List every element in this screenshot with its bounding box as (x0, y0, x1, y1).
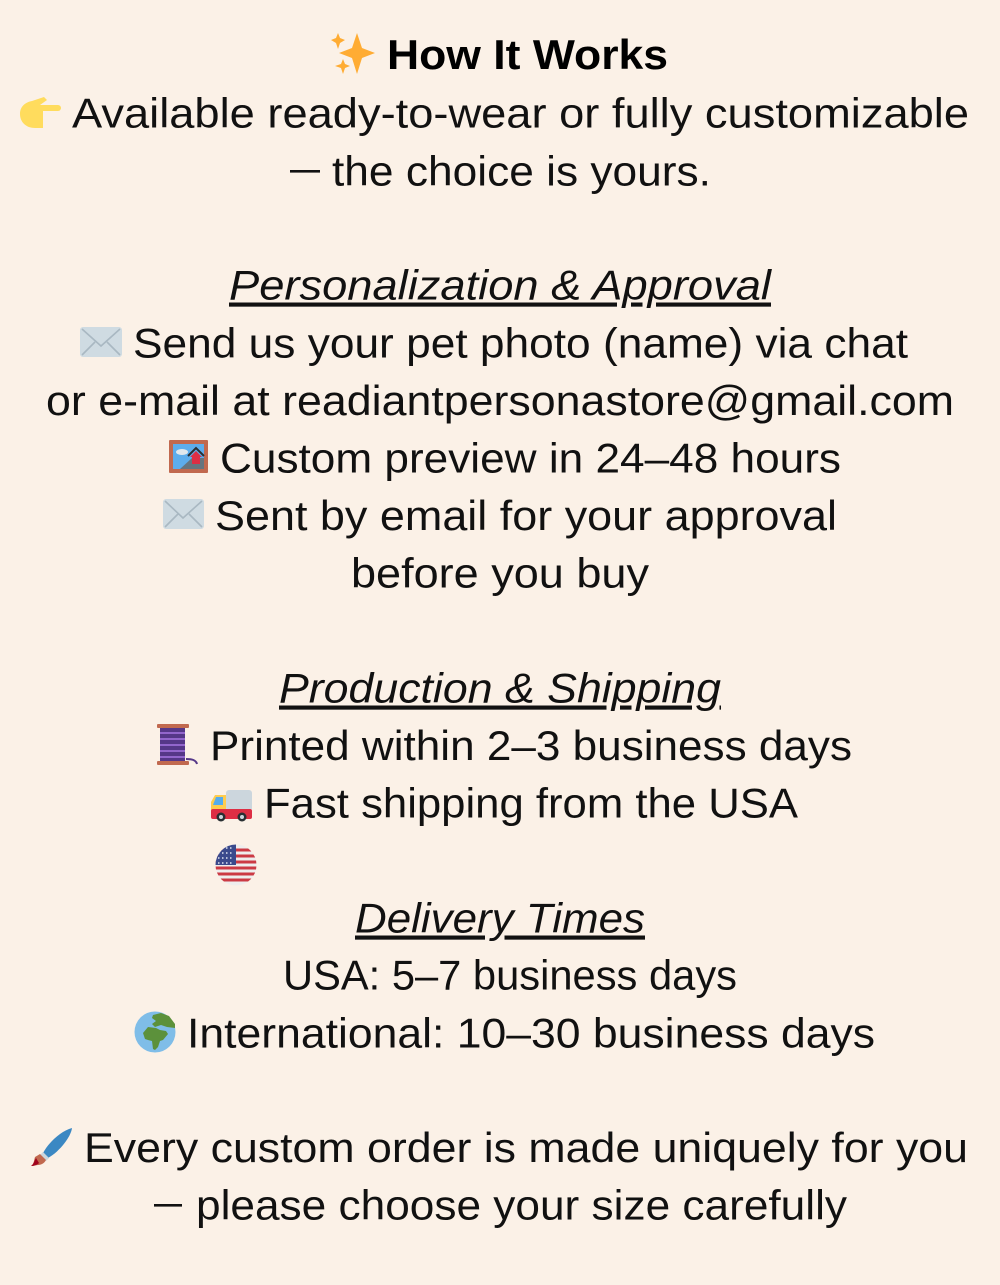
section: personalization steps: or e-mail at readiantpersonastore@gmail.com (46, 377, 954, 424)
title: How It Works (387, 31, 668, 78)
closing note: Every custom order is made uniquely for you (84, 1124, 968, 1171)
heading: Production & Shipping: Production & Shipping (279, 664, 721, 712)
section: personalization steps: Send us your pet photo (name) via chat (133, 320, 908, 366)
section: personalization steps (46, 320, 954, 596)
icon: globe (134, 1012, 176, 1052)
icon: framed picture (169, 440, 208, 473)
section: delivery times: International: 10–30 business days (187, 1010, 875, 1056)
section: production steps: Printed within 2–3 business days (210, 722, 852, 769)
closing note: please choose your size carefully (196, 1182, 847, 1228)
intro text: the choice is yours. (332, 148, 711, 194)
section: personalization steps: Sent by email for your approval (215, 492, 837, 539)
section: personalization steps: Custom preview in 24–48 hours (220, 434, 841, 482)
heading: Delivery Times: Delivery Times (355, 894, 645, 942)
icon: paintbrush (31, 1128, 72, 1166)
icon: USA flag (215, 844, 257, 886)
icon: sparkles (331, 33, 375, 74)
icon: envelope (80, 327, 122, 357)
icon: thread spool (157, 724, 197, 765)
section: delivery times (134, 952, 875, 1056)
heading: Personalization & Approval: Personalization & Approval (229, 262, 773, 308)
closing note (31, 1124, 968, 1228)
section: delivery times: USA: 5–7 business days (283, 952, 737, 998)
intro text: Available ready-to-wear or fully customizable (72, 90, 969, 136)
intro text (20, 90, 969, 194)
icon: envelope (163, 499, 204, 529)
icon: delivery truck (211, 790, 252, 822)
section: production steps (157, 722, 852, 886)
icon: pointing hand (20, 97, 61, 128)
section: personalization steps: before you buy (351, 550, 649, 596)
section: production steps: Fast shipping from the USA (264, 780, 798, 826)
